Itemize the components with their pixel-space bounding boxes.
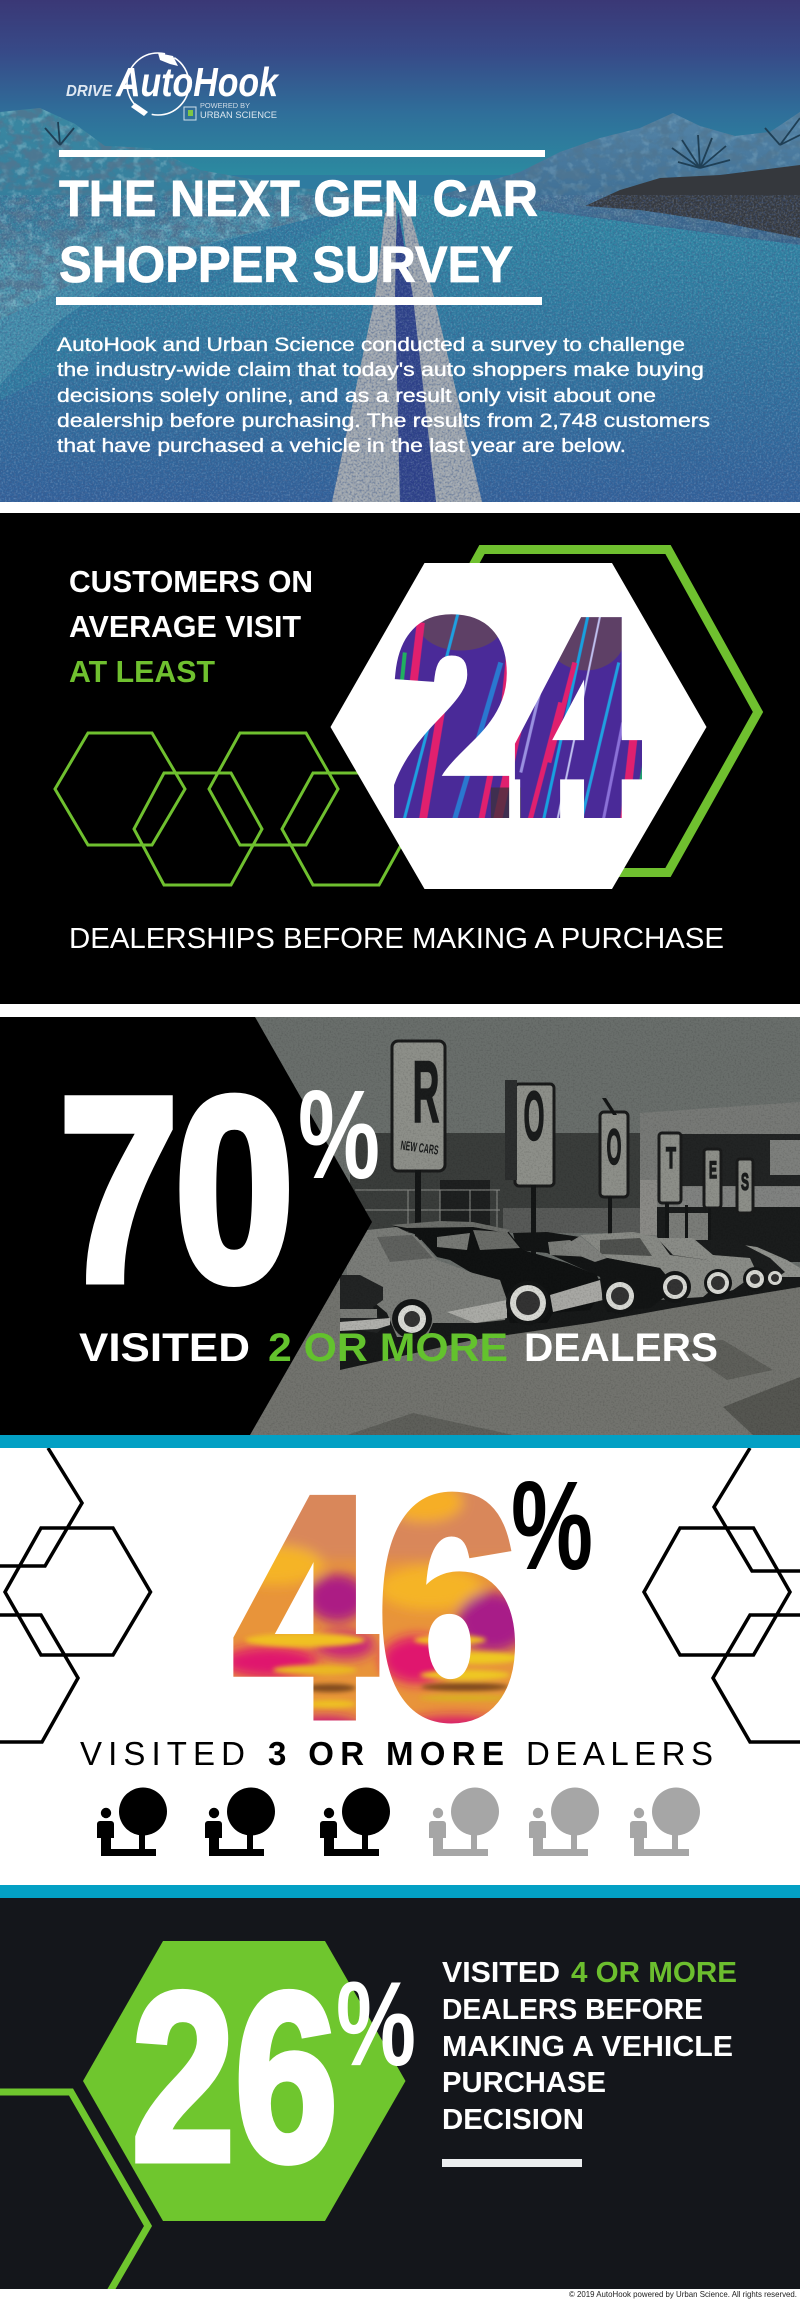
black outline hexagons right — [644, 1448, 800, 1742]
big number 2.4: 2. — [391, 563, 567, 871]
heading — [69, 564, 313, 689]
text block: DECISION — [442, 2104, 584, 2136]
intro text block: AutoHook and Urban Science conducted a survey to challenge — [57, 334, 685, 356]
title: THE NEXT GEN CAR — [59, 170, 538, 227]
photo: vintage car lot: R — [412, 1042, 440, 1141]
caption: visited 2 or more dealers: 2 OR MORE — [268, 1326, 508, 1370]
photo: vintage car lot: T — [666, 1142, 676, 1175]
big number 70 percent: 70 — [59, 1043, 294, 1336]
black outline hexagons left — [0, 1448, 150, 1742]
photo: vintage car lot: S — [741, 1169, 749, 1196]
logo: Drive AutoHook powered by Urban Science: AutoHook — [115, 59, 280, 105]
intro text block: decisions solely online, and as a result only visit about one — [57, 385, 656, 407]
intro text block: dealership before purchasing. The results from 2,748 customers — [57, 410, 710, 432]
caption: visited 3 or more dealers: DEALERS — [526, 1735, 713, 1772]
panel: 2.4 dealerships — [0, 513, 800, 1004]
big number 46 percent: 46 — [234, 1434, 520, 1782]
big number 2.4 — [394, 614, 642, 818]
text block: VISITED — [442, 1957, 560, 1989]
logo: Drive AutoHook powered by Urban Science — [66, 53, 280, 121]
white hexagon — [330, 563, 706, 889]
icons: people and trees — [97, 1788, 700, 1856]
big number 2.4: 4 — [516, 563, 639, 871]
accent bar — [442, 2159, 582, 2167]
title: SHOPPER SURVEY — [59, 236, 513, 293]
road stripes — [332, 200, 400, 502]
heading: CUSTOMERS ON — [69, 564, 313, 599]
panel: 46 percent — [0, 1434, 800, 1885]
text block: MAKING A VEHICLE — [442, 2031, 733, 2063]
panel: 70 percent with dealership photo — [0, 1017, 800, 1435]
caption: visited 2 or more dealers: DEALERS — [524, 1326, 718, 1370]
intro text block: the industry-wide claim that today's auto shoppers make buying — [57, 359, 704, 381]
black arrow-hexagon panel — [0, 1017, 372, 1435]
signs — [392, 1041, 753, 1213]
intro text block: that have purchased a vehicle in the last year are below. — [57, 435, 626, 457]
text block: DEALERS BEFORE — [442, 1994, 703, 2026]
large green hexagon outline — [392, 550, 758, 872]
text block — [442, 1957, 737, 2136]
photo: vintage car lot — [250, 1017, 800, 1435]
green hexagon — [83, 1941, 406, 2221]
caption: visited 3 or more dealers: 3 OR MORE — [268, 1735, 504, 1772]
caption: visited 3 or more dealers: VISITED — [80, 1735, 245, 1772]
photo: vintage car lot: NEW CARS — [400, 1137, 440, 1158]
photo: vintage car lot: E — [709, 1157, 717, 1184]
big number 70 percent: % — [298, 1064, 380, 1205]
small green outline hexagons — [55, 733, 410, 885]
wheels — [392, 1267, 767, 1339]
text block: PURCHASE — [442, 2067, 606, 2099]
logo: Drive AutoHook powered by Urban Science: DRIVE — [66, 83, 113, 100]
logo: Drive AutoHook powered by Urban Science: POWERED BY — [200, 101, 250, 110]
caption: visited 2 or more dealers: VISITED — [79, 1326, 250, 1370]
big number 26 percent: % — [336, 1957, 416, 2091]
big number 26 percent: 26 — [132, 1944, 338, 2211]
text block: 4 OR MORE — [571, 1957, 737, 1989]
heading: AVERAGE VISIT — [69, 609, 301, 644]
panel: hero road photo header — [0, 0, 800, 502]
teal divider top — [0, 1435, 800, 1448]
panel: 46 percent: % — [511, 1455, 593, 1596]
photo: vintage car lot: O — [524, 1077, 544, 1155]
heading: AT LEAST — [69, 654, 215, 689]
logo: Drive AutoHook powered by Urban Science: URBAN SCIENCE — [200, 110, 277, 121]
intro text block — [57, 334, 710, 457]
photo: vintage car lot: O — [606, 1119, 622, 1175]
title — [56, 150, 545, 305]
panel: 26 percent — [0, 1898, 800, 2295]
green hexagon outline — [0, 2092, 148, 2295]
fence — [355, 1190, 500, 1232]
cars — [745, 1245, 800, 1277]
big number 26 percent — [135, 1982, 414, 2166]
caption: DEALERSHIPS BEFORE MAKING A PURCHASE — [69, 923, 724, 955]
teal divider bottom — [0, 1885, 800, 1898]
